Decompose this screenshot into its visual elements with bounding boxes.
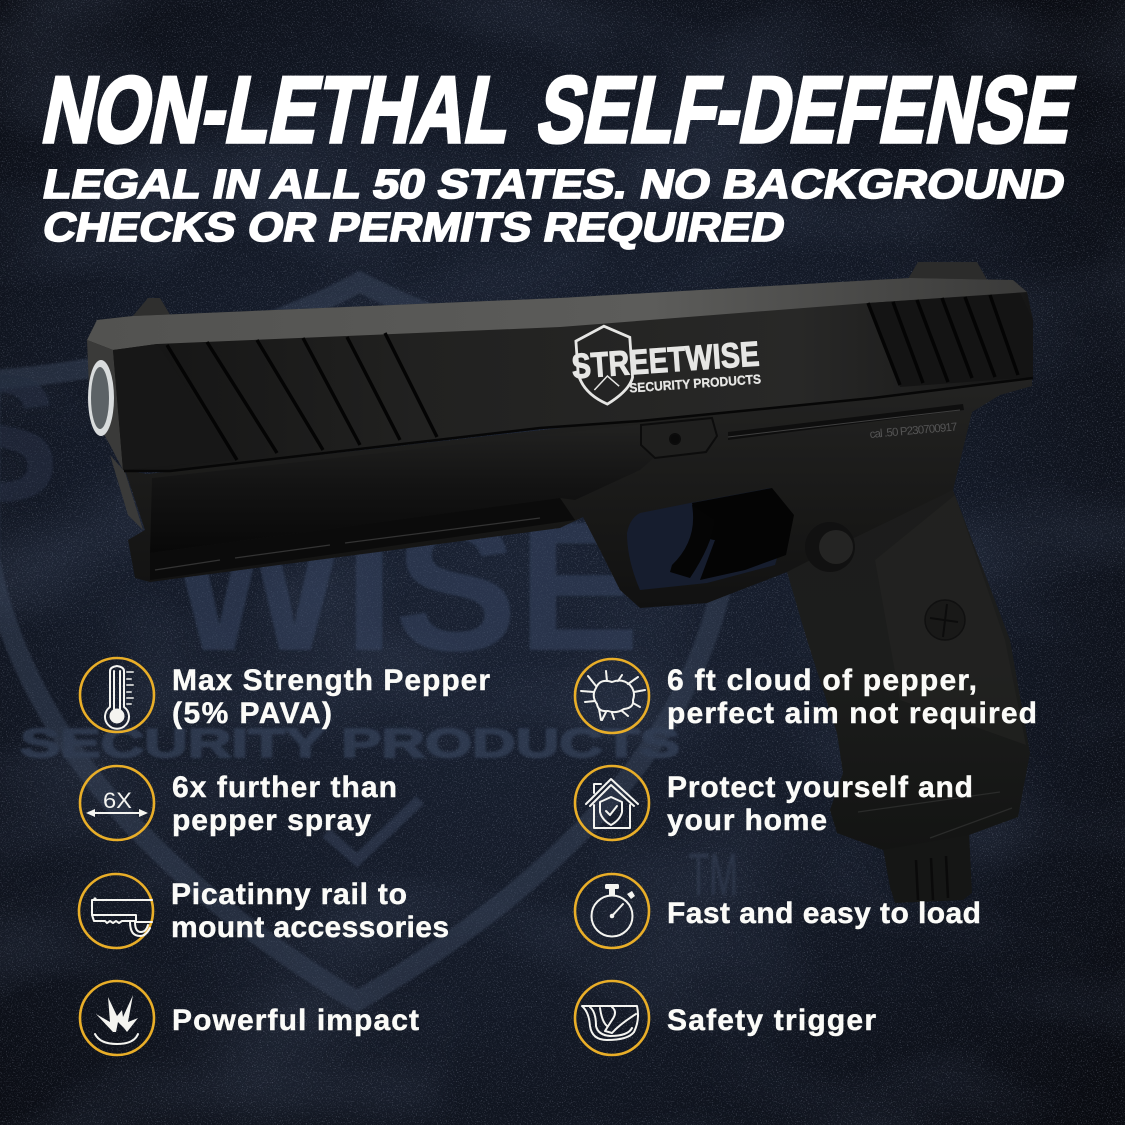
icon: impact burst xyxy=(80,981,154,1055)
feature: powerful impact: Powerful impact xyxy=(172,1004,419,1037)
feature: protect home: Protect yourself and xyxy=(667,771,973,804)
feature: picatinny rail xyxy=(79,874,449,948)
feature: max strength pepper: Max Strength Pepper xyxy=(172,664,490,697)
Streetwise logo on slide: SECURITY PRODUCTS xyxy=(629,371,762,396)
feature: 6x further xyxy=(80,766,397,840)
safety button xyxy=(805,522,855,572)
Streetwise logo on slide xyxy=(569,315,762,406)
icon: pepper cloud xyxy=(575,659,649,733)
feature: powerful impact xyxy=(80,981,419,1055)
slide release xyxy=(641,418,717,458)
feature: max strength pepper: (5% PAVA) xyxy=(172,697,332,730)
feature: protect home: your home xyxy=(667,804,827,837)
subtitle: LEGAL IN ALL 50 STATES. NO BACKGROUND xyxy=(39,161,1069,207)
subtitle: CHECKS OR PERMITS REQUIRED xyxy=(39,204,789,250)
muzzle ring xyxy=(88,360,114,436)
feature: 6x further: 6x further than xyxy=(172,771,397,804)
icon: picatinny rail xyxy=(79,874,153,948)
icon: 6X distance arrow: 6X xyxy=(103,788,132,813)
feature: 6 ft cloud: perfect aim not required xyxy=(667,697,1037,730)
feature: 6 ft cloud: 6 ft cloud of pepper, xyxy=(667,664,977,697)
faded brand watermark: SECURITY PRODUCTS xyxy=(20,720,680,766)
feature: 6 ft cloud xyxy=(575,659,1037,733)
frame, dust cover and trigger guard: cal .50 P230700917 xyxy=(869,421,958,441)
trigger guard opening and trigger xyxy=(627,488,794,590)
icon: thermometer xyxy=(80,658,154,732)
faded brand watermark: TM xyxy=(688,841,738,908)
icon: stopwatch xyxy=(575,874,649,948)
icon: house with shield xyxy=(575,766,649,840)
feature: fast to load: Fast and easy to load xyxy=(667,897,981,930)
feature: fast to load xyxy=(575,874,981,948)
faded brand watermark: WISE xyxy=(170,484,640,690)
title xyxy=(35,58,1083,163)
title: NON-LETHAL xyxy=(35,58,521,163)
feature: picatinny rail: mount accessories xyxy=(171,911,449,944)
pistol xyxy=(87,262,1033,903)
pistol grip and magazine xyxy=(785,400,1030,903)
feature: protect home xyxy=(575,766,973,840)
icon: 6X distance arrow xyxy=(80,766,154,840)
icon: trigger guard xyxy=(575,981,649,1055)
Streetwise logo on slide: STREETWISE xyxy=(570,334,761,386)
feature: picatinny rail: Picatinny rail to xyxy=(171,878,407,911)
frame, dust cover and trigger guard xyxy=(110,378,1032,608)
slide serrations xyxy=(167,295,1018,460)
feature: 6x further: pepper spray xyxy=(172,804,371,837)
subtitle xyxy=(39,161,1069,250)
feature: max strength pepper xyxy=(80,658,490,732)
feature: safety trigger xyxy=(575,981,876,1055)
feature: safety trigger: Safety trigger xyxy=(667,1004,876,1037)
faded brand watermark xyxy=(0,282,738,1001)
slide xyxy=(87,262,1033,471)
